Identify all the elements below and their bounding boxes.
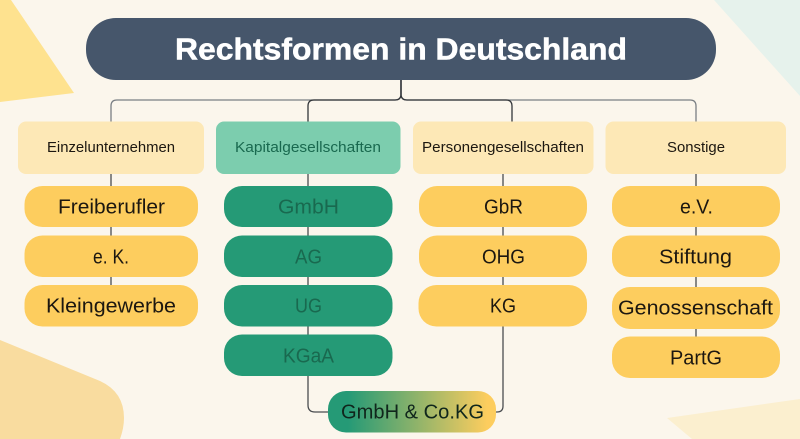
item: Stiftung bbox=[612, 236, 780, 277]
item: KGaA: KGaA bbox=[283, 344, 334, 368]
decoration: mint shape top right bbox=[714, 0, 800, 96]
item: UG bbox=[224, 285, 392, 326]
decoration: cream shape bottom right bbox=[667, 399, 800, 439]
item: GmbH & Co.KG: GmbH & Co.KG bbox=[341, 400, 484, 424]
item: PartG bbox=[612, 336, 780, 378]
item: GbR bbox=[419, 186, 587, 227]
item: Freiberufler bbox=[24, 186, 198, 227]
heading: Personengesellschaften bbox=[413, 122, 594, 174]
item: Genossenschaft bbox=[612, 287, 780, 329]
column: Kapitalgesellschaften bbox=[216, 122, 400, 376]
decoration: yellow triangle top left bbox=[0, 0, 74, 102]
heading: Personengesellschaften: Personengesellschaften bbox=[422, 140, 584, 156]
item: GmbH & Co.KG bbox=[328, 391, 496, 432]
item: PartG: PartG bbox=[670, 346, 722, 370]
item: AG: AG bbox=[295, 246, 322, 268]
item: Kleingewerbe: Kleingewerbe bbox=[46, 294, 176, 318]
item: e. K. bbox=[24, 236, 198, 277]
item: AG bbox=[224, 236, 392, 277]
item: OHG bbox=[419, 236, 587, 277]
item: OHG: OHG bbox=[482, 246, 525, 268]
item: GmbH bbox=[224, 186, 392, 227]
heading: Kapitalgesellschaften: Kapitalgesellschaften bbox=[235, 140, 381, 156]
item: GmbH: GmbH bbox=[278, 196, 339, 218]
item: e.V.: e.V. bbox=[680, 196, 713, 218]
item: UG: UG bbox=[295, 294, 322, 318]
heading: Einzelunternehmen: Einzelunternehmen bbox=[47, 140, 175, 156]
item: KGaA bbox=[224, 334, 392, 376]
decoration: orange shape bottom left bbox=[0, 340, 124, 439]
connector lines bbox=[111, 80, 696, 412]
heading: Sonstige: Sonstige bbox=[667, 140, 725, 156]
title bbox=[86, 18, 716, 80]
item: Genossenschaft: Genossenschaft bbox=[618, 296, 773, 320]
column: Sonstige bbox=[606, 122, 786, 378]
item: Freiberufler: Freiberufler bbox=[58, 196, 165, 218]
heading: Kapitalgesellschaften bbox=[216, 122, 400, 174]
heading: Einzelunternehmen bbox=[18, 122, 204, 174]
heading: Sonstige bbox=[606, 122, 786, 174]
title: Rechtsformen in Deutschland bbox=[175, 32, 627, 66]
item: GbR: GbR bbox=[484, 196, 523, 218]
item: e.V. bbox=[612, 186, 780, 227]
item: KG bbox=[418, 285, 587, 326]
item: Kleingewerbe bbox=[24, 285, 198, 326]
column: Personengesellschaften bbox=[413, 122, 594, 326]
column: Einzelunternehmen bbox=[18, 122, 204, 326]
item: Stiftung: Stiftung bbox=[659, 246, 732, 268]
item: KG: KG bbox=[490, 294, 516, 318]
item: e. K.: e. K. bbox=[93, 246, 129, 268]
